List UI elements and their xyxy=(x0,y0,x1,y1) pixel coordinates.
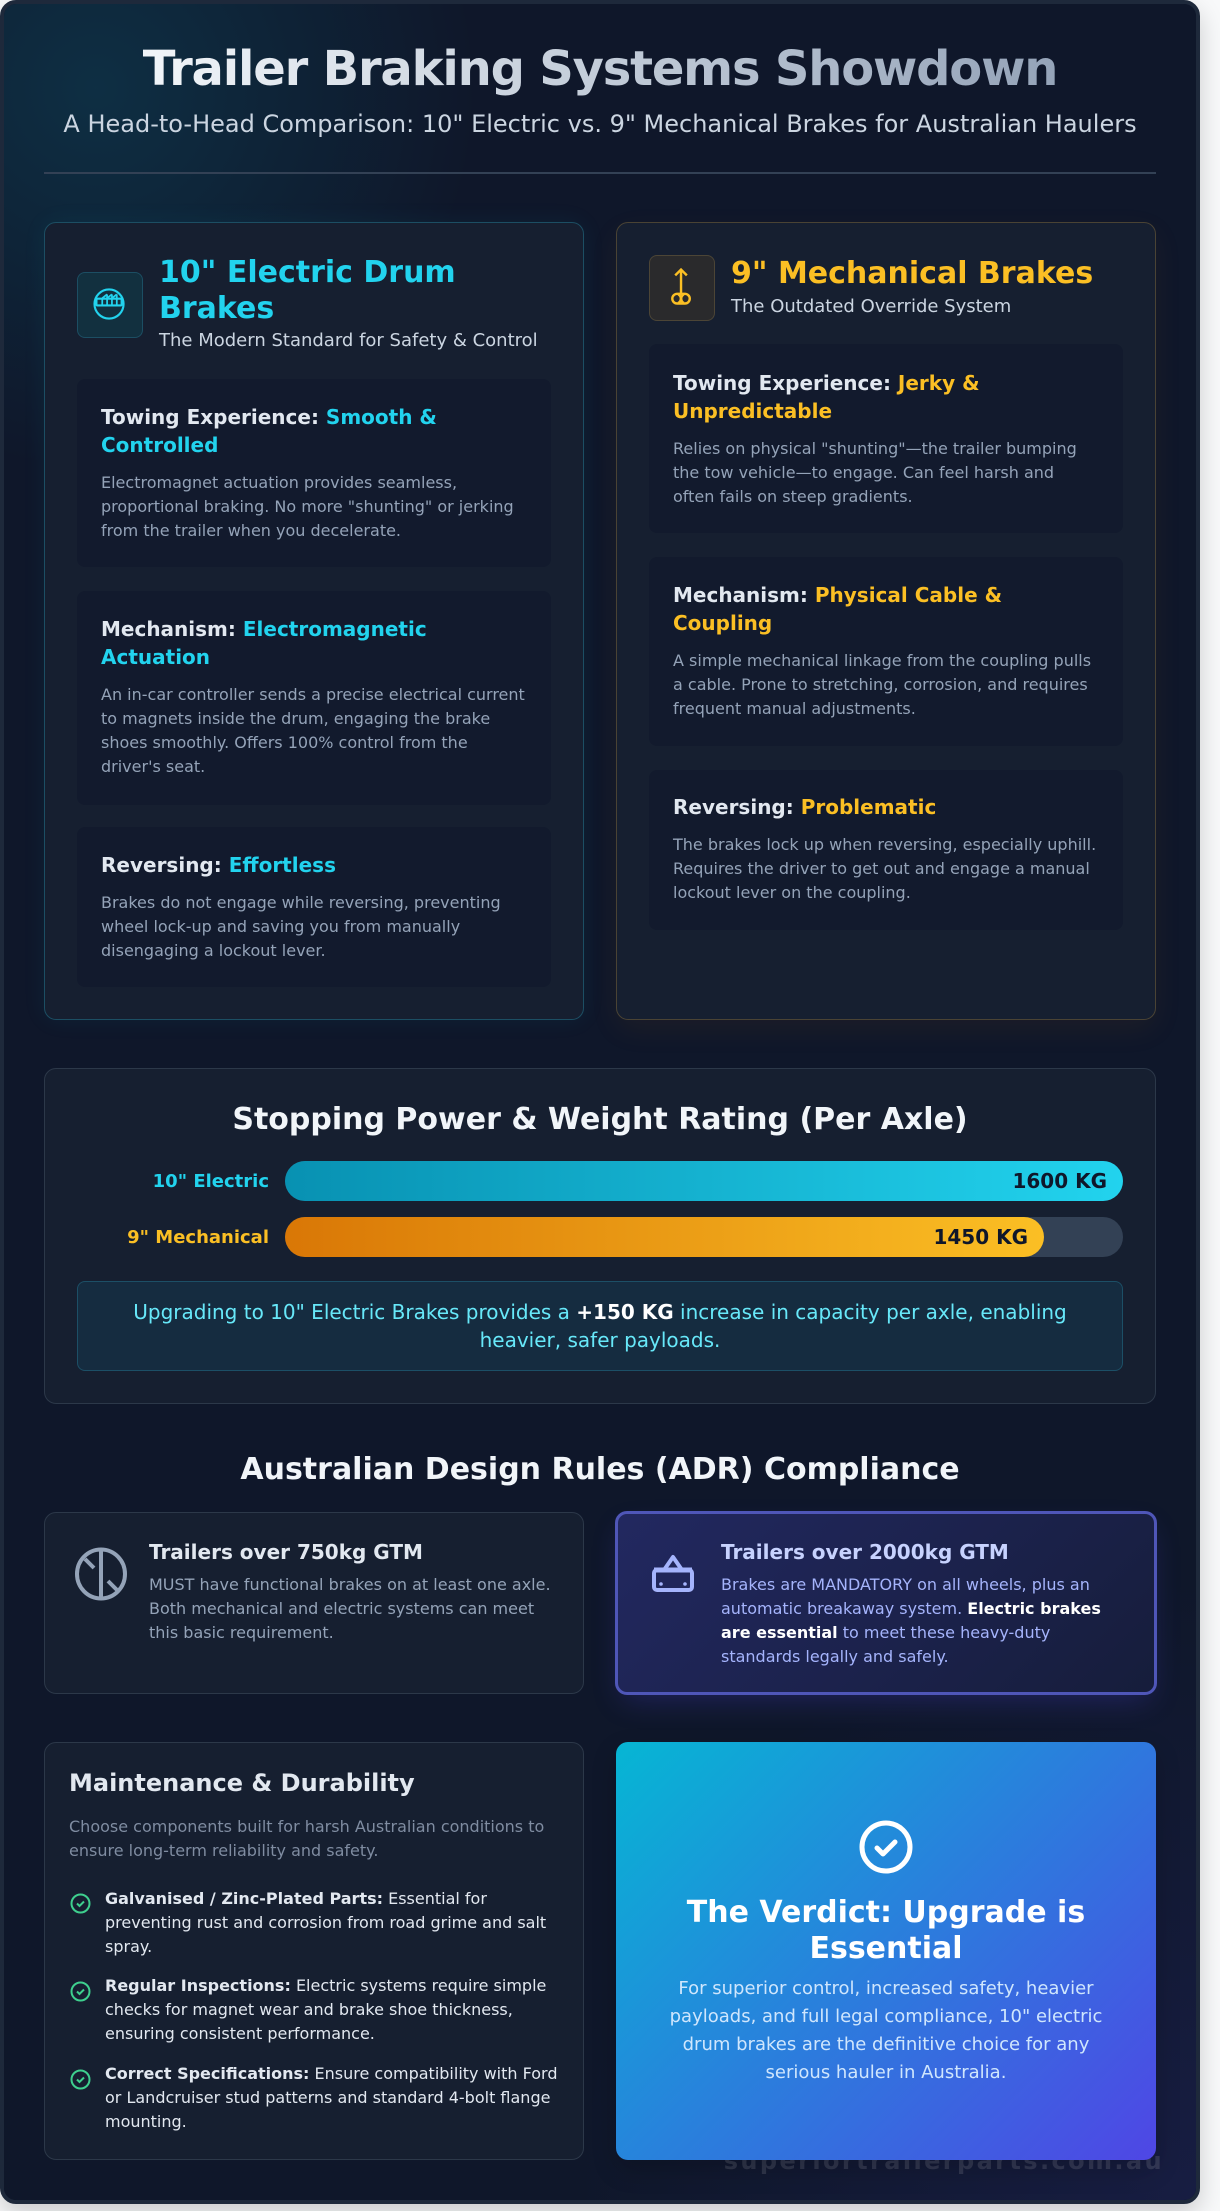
panel: verdict xyxy=(616,1742,1156,2160)
card: mechanical towing experience: Towing Experience: Jerky & Unpredictable xyxy=(673,371,980,423)
card: mechanical mechanism: Mechanism: Physical Cable & Coupling xyxy=(673,583,1002,635)
text: 750kg: Trailers over 750kg GTM xyxy=(149,1540,423,1564)
text: 2000kg: Trailers over 2000kg GTM xyxy=(721,1540,1009,1564)
card: mechanical reversing xyxy=(649,770,1123,930)
subheading: mechanical: The Outdated Override System xyxy=(731,296,1011,317)
heading: maintenance: Maintenance & Durability xyxy=(69,1769,415,1797)
maintenance item 1: Galvanised / Zinc-Plated Parts: Essential for preventing rust and corrosion from road grime and salt spray. xyxy=(105,1889,546,1956)
card: electric mechanism: An in-car controller sends a precise electrical current to magnets inside the drum, engaging the brake shoes smoothly. Offers 100% control from the driver's seat. xyxy=(101,685,525,776)
card: electric towing experience xyxy=(77,379,551,567)
callout: capacity increase xyxy=(77,1281,1123,1371)
icon: mechanical coupling xyxy=(649,255,715,321)
panel: 10 inch electric drum brakes xyxy=(44,222,584,1020)
card: trailers over 750kg xyxy=(44,1512,584,1694)
icon: check 1 xyxy=(70,1894,90,1914)
bar: electric 1600 kg xyxy=(285,1161,1123,1201)
text: 750kg: MUST have functional brakes on at least one axle. Both mechanical and electric systems can meet this basic requirement. xyxy=(149,1575,551,1642)
bar: mechanical 1450 kg: 1450 KG xyxy=(933,1225,1028,1249)
text: verdict: For superior control, increased safety, heavier payloads, and full legal compliance, 10" electric drum brakes are the definitive choice for any serious hauler in Australia. xyxy=(670,1978,1102,2083)
card: trailers over 2000kg xyxy=(615,1511,1157,1695)
subheading: electric: The Modern Standard for Safety & Control xyxy=(159,330,538,351)
card: mechanical mechanism xyxy=(649,557,1123,746)
card: electric reversing: Reversing: Effortless xyxy=(101,853,336,877)
heading: electric: 10" Electric Drum Brakes xyxy=(159,255,456,326)
section heading: ADR: Australian Design Rules (ADR) Compliance xyxy=(240,1452,960,1487)
bar label: electric: 10" Electric xyxy=(153,1171,269,1192)
subtitle: A Head-to-Head Comparison: 10" Electric vs. 9" Mechanical Brakes for Australian Haulers xyxy=(63,110,1137,138)
title: Trailer Braking Systems Showdown xyxy=(143,41,1057,97)
maintenance item 2: Regular Inspections: Electric systems require simple checks for magnet wear and brake shoe thickness, ensuring consistent performance. xyxy=(105,1976,546,2043)
card: electric reversing xyxy=(77,827,551,987)
icon: breakaway system xyxy=(652,1554,694,1592)
bar: mechanical 1450 kg xyxy=(285,1217,1123,1257)
callout: capacity increase: Upgrading to 10" Electric Brakes provides a +150 KG increase in capacity per axle, enabling heavier, safer payloads. xyxy=(133,1300,1067,1352)
card: electric mechanism xyxy=(77,591,551,805)
watermark: superiortrailerparts.com.au xyxy=(724,2147,1164,2175)
card: electric towing experience: Electromagnet actuation provides seamless, proportional braking. No more "shunting" or jerking from the trailer when you decelerate. xyxy=(101,473,514,540)
icon: 750kg brake disc xyxy=(75,1548,127,1600)
icon: check 2 xyxy=(70,1982,90,2002)
card: electric reversing: Brakes do not engage while reversing, preventing wheel lock-up and saving you from manually disengaging a lockout lever. xyxy=(101,893,501,960)
card: electric mechanism: Mechanism: Electromagnetic Actuation xyxy=(101,617,427,669)
card: mechanical towing experience xyxy=(649,344,1123,533)
panel: maintenance and durability xyxy=(44,1742,584,2160)
maintenance item 3: Correct Specifications: Ensure compatibility with Ford or Landcruiser stud patterns and standard 4-bolt flange mounting. xyxy=(105,2064,558,2131)
card: electric towing experience: Towing Experience: Smooth & Controlled xyxy=(101,405,437,457)
bar label: mechanical: 9" Mechanical xyxy=(127,1227,269,1248)
heading: mechanical: 9" Mechanical Brakes xyxy=(731,256,1093,291)
bar: electric 1600 kg: 1600 KG xyxy=(1012,1169,1107,1193)
panel: 9 inch mechanical brakes xyxy=(616,222,1156,1020)
text: 2000kg: Brakes are MANDATORY on all wheels, plus an automatic breakaway system. Electric brakes are essential to meet these heavy-duty standards legally and safely. xyxy=(721,1575,1101,1666)
card: mechanical towing experience: Relies on physical "shunting"—the trailer bumping the tow vehicle—to engage. Can feel harsh and often fails on steep gradients. xyxy=(673,439,1077,506)
card: mechanical reversing: The brakes lock up when reversing, especially uphill. Requires the driver to get out and engage a manual lockout lever on the coupling. xyxy=(673,835,1096,902)
icon: verdict check xyxy=(860,1820,912,1874)
text: 750kg xyxy=(149,1540,551,1642)
icon: electric drum xyxy=(77,272,143,338)
card: mechanical reversing: Reversing: Problematic xyxy=(673,795,936,819)
icon: check 3 xyxy=(70,2070,90,2090)
panel: stopping power chart xyxy=(44,1068,1156,1404)
heading: verdict: The Verdict: Upgrade is Essential xyxy=(687,1895,1085,1966)
text: maintenance intro: Choose components built for harsh Australian conditions to ensure long-term reliability and safety. xyxy=(69,1817,544,1860)
chart heading: Stopping Power & Weight Rating (Per Axle) xyxy=(232,1102,968,1137)
card: mechanical mechanism: A simple mechanical linkage from the coupling pulls a cable. Prone to stretching, corrosion, and requires frequent manual adjustments. xyxy=(673,651,1091,718)
